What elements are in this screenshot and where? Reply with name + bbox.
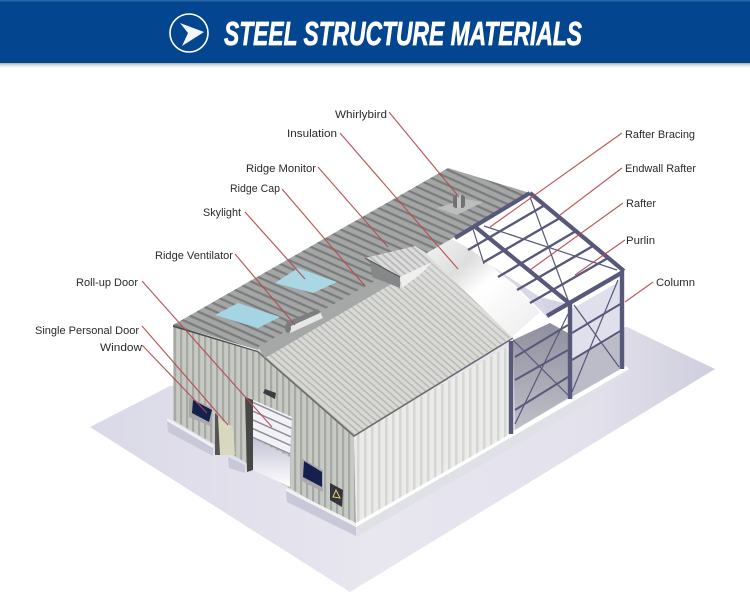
columns	[511, 271, 622, 434]
label: Insulation: Insulation	[287, 128, 337, 140]
left end wall	[173, 327, 356, 527]
insulation	[425, 238, 540, 337]
right side wall	[354, 344, 512, 523]
ridge ventilator	[285, 309, 323, 333]
label: Rafter Bracing: Rafter Bracing	[625, 129, 695, 141]
ground plane	[90, 327, 715, 592]
skylight 2	[215, 303, 280, 328]
label: Whirlybird: Whirlybird	[335, 109, 387, 121]
ridge monitor	[365, 246, 432, 288]
front roof	[257, 246, 513, 436]
leader lines	[142, 112, 653, 427]
back roof	[173, 168, 530, 354]
label: Rafter: Rafter	[626, 198, 656, 210]
label: Endwall Rafter: Endwall Rafter	[625, 163, 696, 175]
label: Ridge Cap: Ridge Cap	[230, 183, 280, 195]
label: Purlin: Purlin	[626, 235, 655, 247]
steel frame interior	[490, 265, 622, 430]
whirlybird	[437, 195, 483, 215]
icon: arrow in circle	[170, 14, 208, 52]
main rafters	[455, 193, 624, 316]
steel frame	[455, 193, 624, 434]
label: Window: Window	[100, 342, 142, 354]
ridge cap	[258, 275, 393, 358]
concrete slab	[356, 366, 630, 537]
skylight 1	[275, 268, 337, 293]
personal door	[215, 413, 235, 455]
label: Roll-up Door: Roll-up Door	[76, 277, 138, 289]
label: Ridge Ventilator: Ridge Ventilator	[155, 250, 233, 262]
window left	[189, 397, 212, 426]
title: STEEL STRUCTURE MATERIALS	[224, 15, 582, 52]
girts	[515, 303, 622, 410]
header banner	[0, 0, 750, 69]
rafter bracing	[473, 197, 619, 424]
roll-up door	[245, 389, 292, 487]
label: Column: Column	[656, 277, 695, 289]
label: Single Personal Door: Single Personal Door	[35, 325, 139, 337]
foundation blocks	[167, 418, 356, 536]
sign panel	[330, 483, 343, 507]
white backdrop under frame	[450, 195, 624, 340]
purlins	[468, 205, 608, 303]
label: Skylight: Skylight	[203, 207, 241, 219]
label: Ridge Monitor: Ridge Monitor	[246, 163, 316, 175]
window right	[300, 458, 323, 492]
